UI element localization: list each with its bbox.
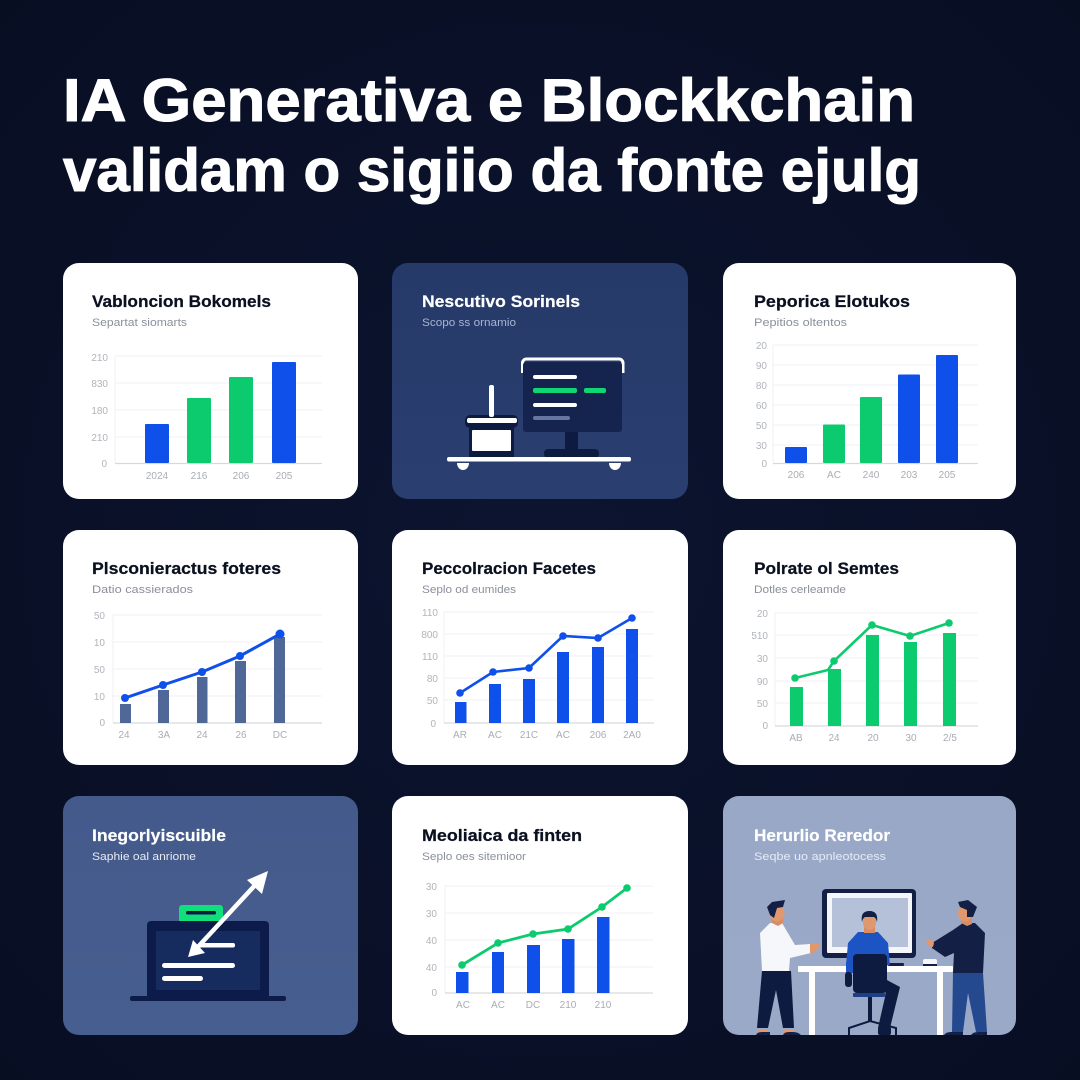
combo chart: 80 xyxy=(427,674,438,685)
combo chart xyxy=(426,882,653,1011)
bar chart: 90 xyxy=(756,361,767,372)
combo chart: 26 xyxy=(235,730,247,741)
subheading: Datio cassierados xyxy=(92,584,194,596)
bar chart: 210 xyxy=(91,353,108,364)
combo chart: 20 xyxy=(757,609,768,620)
heading: Meoliaica da finten xyxy=(422,826,582,845)
bar chart: 80 xyxy=(756,381,767,392)
icon: desktop monitor on shelf with cup xyxy=(447,359,631,470)
combo chart: AC xyxy=(456,1000,470,1011)
combo chart: 10 xyxy=(94,692,105,703)
combo chart xyxy=(94,611,322,741)
combo chart: 206 xyxy=(590,730,607,741)
combo chart: 50 xyxy=(94,665,105,676)
panel: Herurlio Reredor illustration card xyxy=(723,796,1016,1035)
title: IA Generativa e Blockkchain xyxy=(63,67,915,134)
bar chart: 0 xyxy=(101,459,107,470)
subheading: Scopo ss ornamio xyxy=(422,317,516,329)
title: validam o sigiio da fonte ejulg xyxy=(63,137,921,204)
bar chart: 830 xyxy=(91,379,108,390)
combo chart: 10 xyxy=(94,638,105,649)
bar chart: 210 xyxy=(91,433,108,444)
panel: Polrate ol Semtes combo chart card xyxy=(723,530,1016,765)
bar chart: 205 xyxy=(939,470,956,481)
combo chart: 40 xyxy=(426,936,437,947)
bar chart: 205 xyxy=(276,471,293,482)
combo chart: 210 xyxy=(560,1000,577,1011)
icon: laptop with green tag and arrow xyxy=(130,871,286,1001)
bar chart: 240 xyxy=(863,470,880,481)
combo chart: 3A xyxy=(158,730,170,741)
subheading: Seqbe uo apnleotocess xyxy=(754,851,887,863)
combo chart: 2A0 xyxy=(623,730,641,741)
heading: Plsconieractus foteres xyxy=(92,559,281,578)
combo chart: DC xyxy=(273,730,287,741)
panel: Meoliaica da finten combo chart card xyxy=(392,796,688,1035)
combo chart: 50 xyxy=(757,699,768,710)
panel: Nescutivo Sorinels illustration card xyxy=(392,263,688,499)
combo chart: 50 xyxy=(94,611,105,622)
person: right, navy sweater xyxy=(926,900,987,1035)
combo chart: AC xyxy=(556,730,570,741)
combo chart: 21C xyxy=(520,730,538,741)
bar chart: 20 xyxy=(756,341,767,352)
heading: Peporica Elotukos xyxy=(754,292,910,311)
combo chart: 2/5 xyxy=(943,733,957,744)
illustration: three people at a desk with a monitor xyxy=(756,889,987,1035)
combo chart xyxy=(751,609,978,744)
combo chart: 110 xyxy=(422,608,438,619)
bar chart: 203 xyxy=(901,470,918,481)
combo chart: 510 xyxy=(751,631,768,642)
subheading: Saphie oal anriome xyxy=(92,851,196,863)
combo chart: AB xyxy=(789,733,803,744)
combo chart: AC xyxy=(488,730,502,741)
bar chart: 180 xyxy=(91,406,108,417)
subheading: Dotles cerleamde xyxy=(754,584,846,596)
combo chart: DC xyxy=(526,1000,540,1011)
heading: Nescutivo Sorinels xyxy=(422,292,580,311)
desk xyxy=(798,959,953,1035)
combo chart: 0 xyxy=(431,988,437,999)
panel: Plsconieractus foteres combo chart card xyxy=(63,530,358,765)
subheading: Pepitios oltentos xyxy=(754,317,848,329)
subheading: Seplo od eumides xyxy=(422,584,517,596)
combo chart: 24 xyxy=(118,730,130,741)
subheading: Separtat siomarts xyxy=(92,317,188,329)
person: centre, seated on chair xyxy=(845,911,900,1035)
combo chart: AR xyxy=(453,730,467,741)
bar chart: 30 xyxy=(756,441,767,452)
combo chart: 50 xyxy=(427,696,438,707)
panel: Peccolracion Facetes combo chart card xyxy=(392,530,688,765)
bar chart: 206 xyxy=(788,470,805,481)
heading: Polrate ol Semtes xyxy=(754,559,899,578)
heading: Vabloncion Bokomels xyxy=(92,292,271,311)
combo chart xyxy=(421,608,654,741)
bar chart xyxy=(91,353,322,482)
bar chart: 216 xyxy=(191,471,208,482)
bar chart: 60 xyxy=(756,401,767,412)
bar chart: AC xyxy=(827,470,841,481)
heading: Peccolracion Facetes xyxy=(422,559,596,578)
combo chart: 24 xyxy=(828,733,840,744)
combo chart: 0 xyxy=(430,719,436,730)
combo chart: 800 xyxy=(421,630,438,641)
combo chart: 210 xyxy=(595,1000,612,1011)
heading: Herurlio Reredor xyxy=(754,826,890,845)
combo chart: 20 xyxy=(867,733,879,744)
combo chart: 0 xyxy=(762,721,768,732)
combo chart: 0 xyxy=(99,718,105,729)
icon: double-headed arrow xyxy=(188,871,268,957)
panel: Vabloncion Bokomels bar chart card xyxy=(63,263,358,499)
bar chart xyxy=(756,341,978,481)
combo chart: 40 xyxy=(426,963,437,974)
icon: monitor xyxy=(822,889,916,958)
title xyxy=(63,67,921,204)
person: left, white shirt xyxy=(756,900,819,1035)
bar chart: 206 xyxy=(233,471,250,482)
panel: Peporica Elotukos bar chart card xyxy=(723,263,1016,499)
combo chart: 30 xyxy=(905,733,917,744)
panel: Inegorlyiscuible illustration card xyxy=(63,796,358,1035)
combo chart: 110 xyxy=(422,652,438,663)
bar chart: 0 xyxy=(761,459,767,470)
bar chart: 2024 xyxy=(146,471,169,482)
combo chart: 24 xyxy=(196,730,208,741)
bar chart: 50 xyxy=(756,421,767,432)
combo chart: 30 xyxy=(426,882,437,893)
combo chart: 30 xyxy=(426,909,437,920)
combo chart: 30 xyxy=(757,654,768,665)
heading: Inegorlyiscuible xyxy=(92,826,226,845)
combo chart: AC xyxy=(491,1000,505,1011)
subheading: Seplo oes sitemioor xyxy=(422,851,526,863)
combo chart: 90 xyxy=(757,677,768,688)
